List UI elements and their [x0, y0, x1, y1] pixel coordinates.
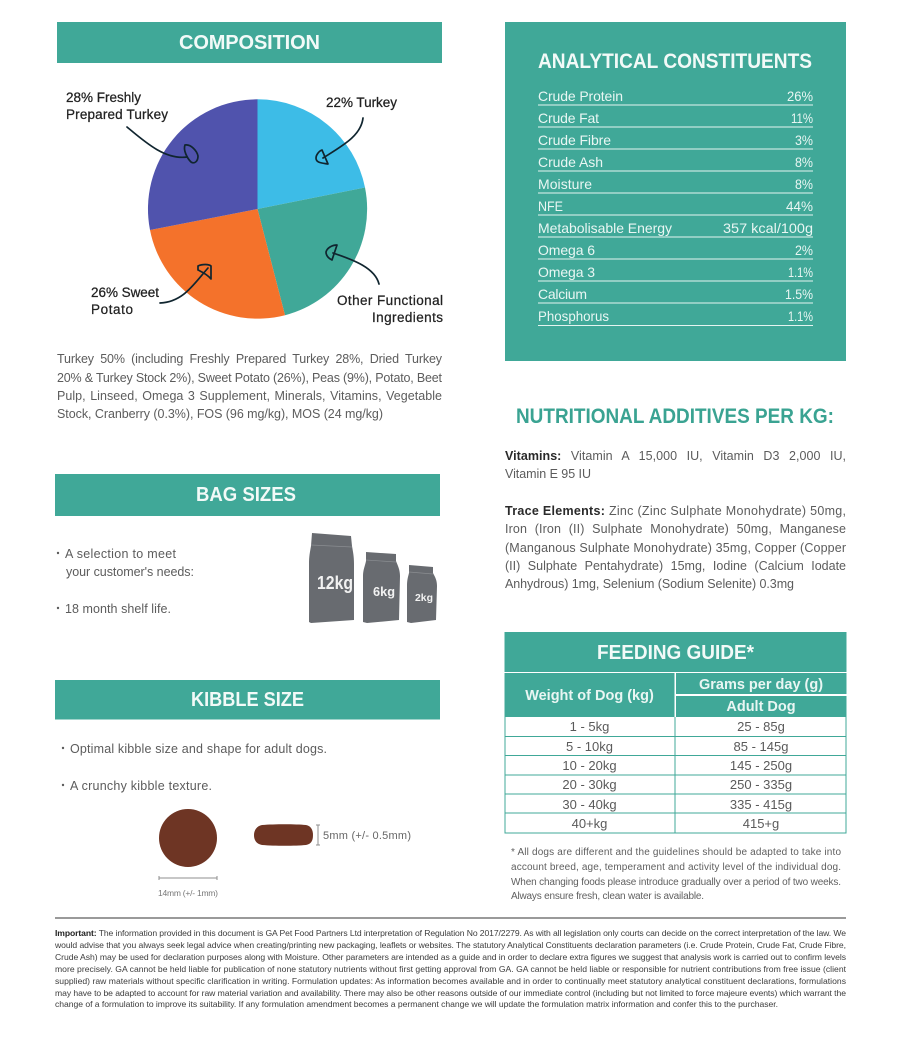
table rows: 30 - 40kg: [562, 797, 617, 812]
row dividers: [538, 105, 813, 326]
table rows: 85 - 145g: [734, 739, 788, 754]
constituents list: 1.1%: [788, 308, 813, 324]
constituents list: Calcium: [538, 286, 587, 302]
table rows: 5 - 10kg: [566, 739, 613, 754]
panel: composition: [57, 22, 443, 421]
heading: kibble size: [55, 680, 440, 720]
label: other functional ingredients: Ingredients: [372, 310, 443, 325]
constituents list: 3%: [795, 132, 813, 148]
table rows: 25 - 85g: [737, 719, 785, 734]
icon: 12kg bag: 12kg: [317, 573, 353, 593]
panel: analytical constituents: [505, 22, 846, 361]
table rows: 415+g: [743, 816, 779, 831]
label: 26% sweet potato: [91, 285, 159, 317]
composition text: 20% & Turkey Stock 2%), Sweet Potato (26%), Peas (9%), Potato, Beet: [57, 371, 443, 385]
icon: 12kg bag: [309, 533, 354, 623]
table rows: 250 - 335g: [730, 777, 792, 792]
arrow: freshly prepared turkey: [127, 127, 198, 163]
constituents list: Omega 3: [538, 264, 595, 280]
kibble text: A crunchy kibble texture.: [70, 779, 212, 793]
table rows: [562, 719, 792, 831]
table rows: 335 - 415g: [730, 797, 792, 812]
label: 22% turkey: 22% Turkey: [326, 95, 397, 110]
constituents list: Crude Protein: [538, 88, 623, 104]
constituents list: 357 kcal/100g: [723, 220, 813, 236]
constituents list: 1.5%: [785, 286, 813, 302]
constituents list: 8%: [795, 154, 813, 170]
bag sizes text: [57, 547, 194, 616]
kibble text: [62, 742, 327, 793]
arrow: sweet potato: [160, 264, 211, 303]
table header: Adult Dog: [726, 699, 796, 715]
constituents list: [538, 88, 813, 324]
legal text: [54, 928, 847, 1009]
table header: Weight of Dog (kg): [525, 688, 654, 704]
constituents list: Crude Ash: [538, 154, 603, 170]
label: 26% sweet potato: Potato: [91, 302, 133, 317]
constituents list: Crude Fat: [538, 110, 599, 126]
icon: 2kg bag: 2kg: [415, 592, 433, 604]
dimension: 5mm: [316, 825, 411, 845]
trace elements text: Anhydrous) 1mg, Selenium (Sodium Selenite) 0.3mg: [505, 577, 794, 591]
table header: Grams per day (g): [699, 677, 823, 693]
icon: 2kg bag: [407, 565, 437, 623]
constituents list: Metabolisable Energy: [538, 220, 672, 236]
legal text: may have to be adapted to account for raw material variation and availability. There may also be other reasons outside of our immediate control (including but not limited to force majeure events) which warrant the: [55, 988, 846, 998]
constituents list: 8%: [795, 176, 813, 192]
bag sizes text: your customer's needs:: [66, 565, 194, 579]
constituents list: 11%: [791, 110, 813, 126]
label: other functional ingredients: [337, 293, 443, 325]
trace elements text: [505, 504, 846, 591]
composition text: Stock, Cranberry (0.3%), FOS (96 mg/kg), MOS (24 mg/kg): [57, 407, 383, 421]
constituents list: 2%: [795, 242, 813, 258]
constituents list: 26%: [787, 88, 813, 104]
legal text: would advise that you always seek legal advice when creating/printing new packaging, leaflets or websites. The statutory Analytical Constituents declaration parameters (i.e. Crude Protein, Crude Fat, Crude Fibre,: [54, 940, 846, 950]
feeding footnote: account breed, age, temperament and activity level of the individual dog.: [511, 862, 841, 873]
table grid: [505, 717, 846, 833]
arrow: turkey: [316, 118, 363, 164]
dimension: 14mm: [158, 876, 218, 898]
label: 26% sweet potato: 26% Sweet: [91, 285, 159, 300]
label: other functional ingredients: Other Functional: [337, 293, 443, 308]
constituents list: 1.1%: [788, 264, 813, 280]
icon: 6kg bag: [363, 552, 400, 623]
constituents list: Omega 6: [538, 242, 595, 258]
trace elements text: Iron (Iron (II) Sulphate Monohydrate) 50mg, Manganese: [505, 522, 846, 536]
pie chart: [148, 99, 367, 319]
feeding footnote: * All dogs are different and the guidelines should be adapted to take into: [511, 847, 841, 858]
constituents list: Phosphorus: [538, 308, 609, 324]
dimension: 5mm: 5mm (+/- 0.5mm): [323, 830, 411, 842]
icon: kibble top view: [159, 809, 217, 867]
constituents list: Crude Fibre: [538, 132, 611, 148]
bag sizes text: A selection to meet: [65, 547, 177, 561]
table rows: 10 - 20kg: [562, 758, 617, 773]
table rows: 40+kg: [572, 816, 607, 831]
panel: kibble size: [55, 680, 440, 898]
composition text: Pulp, Linseed, Omega 3 Supplement, Minerals, Vitamins, Vegetable: [57, 389, 442, 403]
legal text: change of a formulation to improve its suitability. If any formulation amendment becomes a permanent change we will update the formulation matrix information and confer this to the purchaser.: [55, 999, 778, 1009]
composition text: Turkey 50% (including Freshly Prepared Turkey 28%, Dried Turkey: [57, 352, 443, 366]
vitamins text: [505, 449, 846, 481]
heading: analytical constituents: ANALYTICAL CONSTITUENTS: [538, 50, 812, 73]
panel: bag sizes: [55, 474, 440, 623]
constituents list: NFE: [538, 198, 563, 214]
kibble text: Optimal kibble size and shape for adult dogs.: [70, 742, 327, 756]
heading: bag sizes: BAG SIZES: [196, 484, 296, 506]
label: 28% freshly prepared turkey: Prepared Turkey: [66, 107, 168, 122]
bag sizes text: 18 month shelf life.: [65, 602, 171, 616]
vitamins text: Vitamins: Vitamin A 15,000 IU, Vitamin D3 2,000 IU,: [505, 449, 846, 463]
heading: feeding guide: FEEDING GUIDE*: [597, 642, 754, 664]
constituents list: Moisture: [538, 176, 592, 192]
legal text: more precisely. GA cannot be held liable for publication of none statutory nutrients without first getting approval from GA. GA cannot be held liable or responsible for nutrient contributions from free issue (client: [55, 964, 847, 974]
trace elements text: (Manganous Sulphate Monohydrate) 35mg, Copper (Copper: [505, 541, 846, 555]
panel: nutritional additives: [505, 405, 846, 591]
label: 28% freshly prepared turkey: 28% Freshly: [66, 90, 141, 105]
feeding footnote: [511, 847, 841, 902]
label: 28% freshly prepared turkey: [66, 90, 168, 122]
heading: composition: [57, 22, 442, 63]
panel: legal notice: [54, 917, 847, 1009]
composition text: [57, 352, 443, 421]
table rows: 20 - 30kg: [562, 777, 617, 792]
heading: composition: COMPOSITION: [179, 32, 320, 54]
heading: nutritional additives: NUTRITIONAL ADDITIVES PER KG:: [516, 405, 834, 428]
legal text: supplied) raw materials without specific clarification in writing. Formulation updates: As information becomes available and in order to continually meet statutory analytical constituent declarations, formulations: [55, 976, 846, 986]
dimension: 14mm: 14mm (+/- 1mm): [158, 888, 218, 898]
icon: kibble side view: [254, 824, 313, 846]
table rows: 145 - 250g: [730, 758, 792, 773]
heading: kibble size: KIBBLE SIZE: [191, 689, 304, 711]
legal text: Important: The information provided in this document is GA Pet Food Partners Ltd interpretation of Regulation No 2017/2279. As with all legislation only courts can decide on the correct interpretation of the law. We: [55, 928, 846, 938]
table rows: 1 - 5kg: [570, 719, 609, 734]
arrow: other functional ingredients: [326, 245, 379, 284]
heading: bag sizes: [55, 474, 440, 516]
legal text: Crude Ash) may be used for declaration purposes along with Moisture. Other parameters are intended as a guide and in order to declare extra figures we suggest that analysis work is carried out to confirm levels: [55, 952, 846, 962]
constituents list: 44%: [786, 198, 813, 214]
icon: 6kg bag: 6kg: [373, 584, 395, 599]
panel: feeding guide: [504, 632, 846, 902]
trace elements text: Trace Elements: Zinc (Zinc Sulphate Monohydrate) 50mg,: [505, 504, 846, 518]
heading: feeding guide: [504, 632, 846, 672]
feeding footnote: Always ensure fresh, clean water is available.: [511, 891, 704, 902]
vitamins text: Vitamin E 95 IU: [505, 467, 591, 481]
table header: [504, 673, 846, 717]
trace elements text: (II) Sulphate Pentahydrate) 15mg, Iodine (Calcium Iodate: [505, 559, 846, 573]
feeding footnote: When changing foods please introduce gradually over a period of two weeks.: [511, 877, 841, 888]
